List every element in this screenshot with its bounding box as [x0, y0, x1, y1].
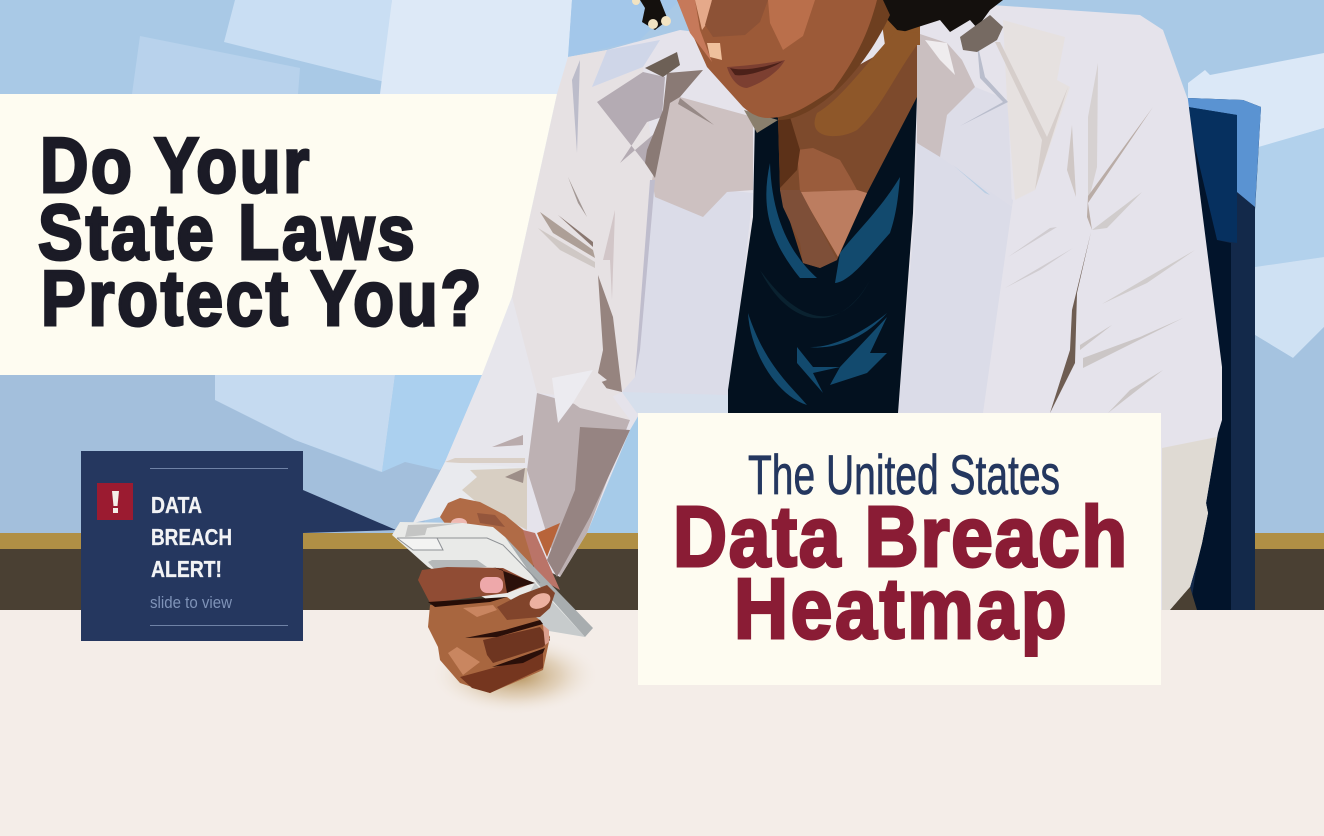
- panel: heatmap title: [638, 413, 1161, 685]
- background: map wall: [0, 0, 1324, 540]
- alert text: [151, 492, 232, 582]
- wall trim band: [0, 490, 1324, 610]
- icon: alert: [97, 483, 133, 520]
- heading: Do Your State Laws Protect You?: Do Your: [40, 122, 309, 209]
- neck: [744, 30, 917, 268]
- face: [677, 0, 890, 120]
- phone: [392, 522, 593, 637]
- heading: Do Your State Laws Protect You?: [38, 122, 481, 342]
- heading: Do Your State Laws Protect You?: State Laws: [38, 189, 415, 276]
- alert text: BREACH: [151, 524, 232, 550]
- panel: title: [0, 94, 557, 375]
- top: [728, 97, 917, 413]
- alert text: DATA: [151, 492, 202, 518]
- illustration: woman with phone: [392, 0, 1261, 715]
- chair: [1188, 98, 1261, 610]
- hair: [632, 0, 1003, 52]
- heading: Data Breach Heatmap: Data Breach: [673, 490, 1127, 584]
- heading: Do Your State Laws Protect You?: Protect You?: [41, 255, 481, 342]
- hand behind phone: [440, 498, 560, 590]
- heading: Data Breach Heatmap: [673, 490, 1127, 656]
- subheading: The United States: The United States: [748, 443, 1060, 506]
- panel: data breach alert: [81, 451, 303, 641]
- hand front fingers: [418, 567, 555, 693]
- desk surface: [0, 610, 1324, 836]
- shadow: [430, 635, 600, 715]
- alert text: ALERT!: [151, 556, 222, 582]
- heading: Data Breach Heatmap: Heatmap: [734, 562, 1067, 656]
- jacket: [413, 5, 1222, 610]
- slide to view: slide to view: [150, 593, 233, 612]
